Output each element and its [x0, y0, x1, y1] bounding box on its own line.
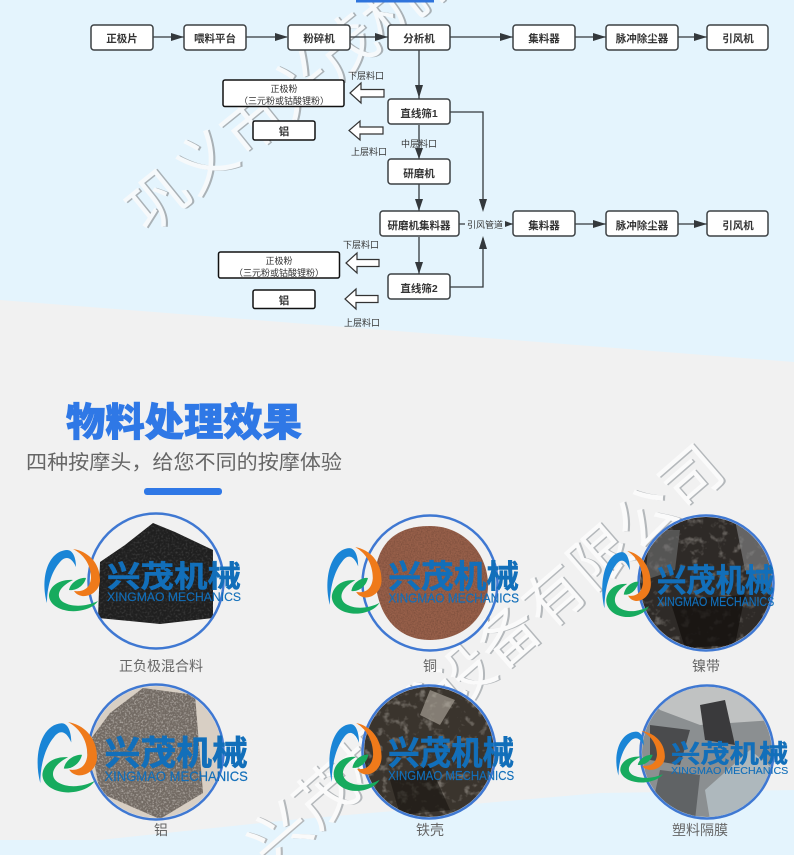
logo: XINGMAO MECHANICS — [107, 590, 241, 604]
process box: 脉冲除尘器 bottom: 脉冲除尘器 — [616, 219, 669, 232]
output box: 正极粉 upper — [223, 80, 344, 106]
logo: 兴茂机械 — [671, 740, 788, 768]
process box: 分析机: 分析机 — [403, 32, 435, 45]
title underline — [144, 488, 222, 495]
top blue bar — [356, 0, 434, 2]
process box: 脉冲除尘器 top — [606, 25, 678, 50]
label: 中层料口: 中层料口 — [401, 138, 437, 149]
photo: iron shell — [363, 686, 495, 818]
process box: 研磨机 — [388, 159, 450, 184]
label: 下层料口 1: 下层料口 — [348, 70, 384, 81]
logo — [616, 731, 788, 782]
photo ring — [640, 686, 774, 818]
process box: 正极片: 正极片 — [106, 32, 138, 45]
item: 塑料隔膜 — [616, 686, 788, 838]
flowchart — [91, 25, 768, 328]
connector lines — [153, 33, 707, 287]
output box: 铝 upper — [253, 121, 315, 140]
logo — [602, 551, 774, 617]
logo: XINGMAO MECHANICS — [657, 595, 774, 609]
output box: 正极粉 lower: （三元粉或钴酸锂粉） — [234, 267, 324, 278]
photo ring — [638, 516, 774, 650]
process box: 研磨机: 研磨机 — [403, 167, 435, 180]
process box: 集料器 bottom — [513, 211, 575, 236]
photo: black powder heap — [98, 523, 213, 624]
process box: 集料器 bottom: 集料器 — [528, 219, 560, 232]
process box: 直线筛1: 直线筛1 — [400, 107, 438, 120]
caption: 铁壳 — [416, 822, 444, 838]
caption: 塑料隔膜 — [672, 822, 728, 838]
output box: 正极粉 lower — [218, 252, 340, 278]
photo ring — [362, 686, 496, 818]
background: grey slanted band — [0, 300, 794, 840]
process box: 粉碎机 — [288, 25, 350, 50]
label: 下层料口 2: 下层料口 — [343, 239, 379, 250]
process box: 研磨机集料器 — [380, 211, 459, 236]
process box: 引风机 top: 引风机 — [722, 32, 754, 45]
hollow arrow: 上层料口 1 — [349, 121, 383, 140]
caption: 铝 — [154, 822, 168, 838]
item: 铁壳 — [329, 686, 514, 838]
process box: 分析机 — [388, 25, 450, 50]
logo: 兴茂机械 — [104, 734, 248, 772]
photo: nickel strip — [640, 517, 772, 649]
output box: 正极粉 lower: 正极粉 — [265, 255, 293, 266]
output box: 正极粉 upper: 正极粉 — [270, 83, 298, 94]
photo ring — [88, 514, 224, 648]
item: 正负极混合料 — [44, 514, 241, 674]
section title: 物料处理效果 — [66, 402, 302, 445]
section subtitle: 四种按摩头，给您不同的按摩体验 — [26, 451, 342, 474]
logo: 兴茂机械 — [107, 561, 241, 594]
process box: 粉碎机: 粉碎机 — [303, 32, 335, 45]
output box: 铝 upper: 铝 — [279, 125, 289, 138]
process box: 正极片 — [91, 25, 153, 50]
hollow arrow: 下层料口 1 — [350, 83, 384, 103]
item: 铜 — [327, 516, 519, 674]
process box: 引风机 bottom — [707, 211, 768, 236]
hollow arrow: 上层料口 2 — [345, 289, 378, 309]
photo: copper powder — [377, 526, 488, 640]
process box: 引风机 top — [707, 25, 768, 50]
process box: 引风机 bottom: 引风机 — [722, 219, 754, 232]
logo: XINGMAO MECHANICS — [104, 769, 248, 784]
item: 铝 — [38, 684, 248, 838]
caption: 正负极混合料 — [119, 658, 203, 674]
logo: XINGMAO MECHANICS — [671, 766, 788, 777]
photo: aluminium granules — [88, 686, 222, 820]
logo — [327, 547, 519, 614]
caption: 铜 — [423, 658, 437, 674]
process box: 研磨机集料器: 研磨机集料器 — [388, 219, 451, 232]
photo: plastic separator — [640, 686, 775, 820]
photo ring — [362, 516, 498, 650]
caption: 镍带 — [692, 658, 720, 674]
process box: 集料器 top — [513, 25, 575, 50]
process box: 集料器 top: 集料器 — [528, 32, 560, 45]
hollow arrow: 下层料口 2 — [346, 253, 379, 273]
logo — [44, 549, 241, 611]
photo ring — [88, 684, 224, 820]
label: 上层料口 2: 上层料口 — [344, 317, 380, 328]
process box: 喂料平台: 喂料平台 — [194, 32, 236, 45]
logo: XINGMAO MECHANICS — [388, 591, 519, 606]
process box: 脉冲除尘器 top: 脉冲除尘器 — [616, 32, 669, 45]
process box: 直线筛1 — [388, 99, 450, 124]
process box: 直线筛2: 直线筛2 — [400, 282, 438, 295]
label: 引风管道: 引风管道 — [467, 219, 503, 230]
process box: 喂料平台 — [184, 25, 246, 50]
logo — [329, 723, 514, 791]
logo: 兴茂机械 — [657, 563, 774, 599]
logo: 兴茂机械 — [388, 558, 519, 595]
output box: 正极粉 upper: （三元粉或钴酸锂粉） — [239, 95, 329, 106]
process box: 脉冲除尘器 bottom — [606, 211, 678, 236]
process box: 直线筛2 — [388, 274, 450, 299]
item: 镍带 — [602, 516, 774, 674]
output box: 铝 lower — [253, 290, 315, 308]
label: 上层料口 1: 上层料口 — [351, 146, 387, 157]
logo: XINGMAO MECHANICS — [388, 768, 514, 783]
logo: 兴茂机械 — [388, 736, 514, 772]
output box: 铝 lower: 铝 — [279, 294, 289, 307]
logo — [38, 722, 248, 792]
